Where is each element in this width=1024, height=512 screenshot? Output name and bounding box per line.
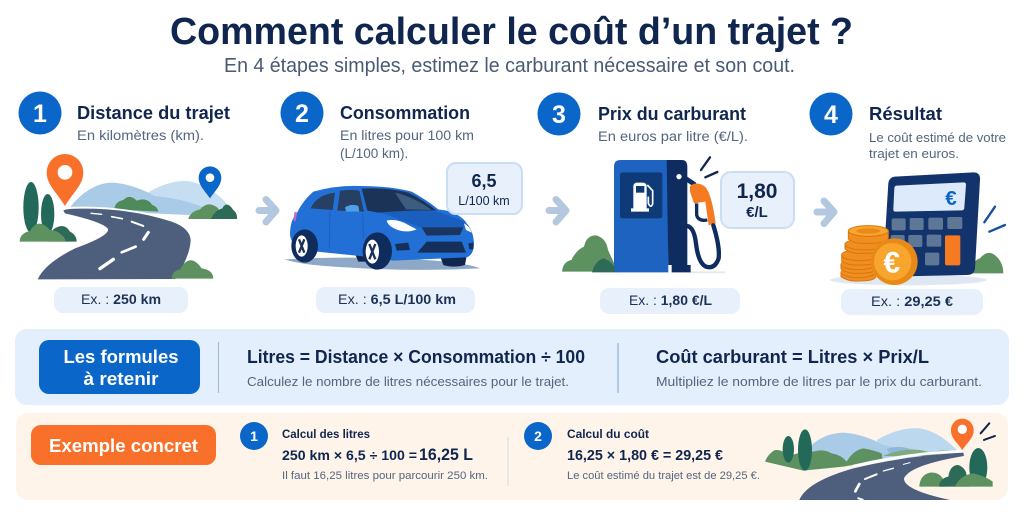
value callout: 6,5 L/100 km: L/100 km: [458, 194, 510, 208]
example step 2: cost calculation: 16,25 × 1,80 € = 29,25 €: [567, 448, 723, 464]
subtitle: En 4 étapes simples, estimez le carburant nécessaire et son cout.: [224, 55, 795, 77]
example step 2: cost calculation: [524, 422, 760, 482]
step 1 number badge: [18, 92, 62, 134]
illustration: calculator and coins: €: [883, 246, 900, 279]
step 1 example pill: [54, 287, 188, 313]
example step 2: cost calculation: 2: [534, 428, 542, 444]
panel: formulas: [15, 329, 1009, 405]
step 1 number badge: 1: [33, 100, 47, 128]
example step 1: litres calculation: 16,25 L: [419, 445, 473, 464]
value callout: 6,5 L/100 km: 6,5: [471, 171, 497, 191]
example step 1: litres calculation: Calcul des litres: [282, 427, 370, 441]
example step 1: litres calculation: Il faut 16,25 litres pour parcourir 250 km.: [282, 470, 488, 482]
step 4 description: trajet en euros.: [869, 147, 959, 161]
arrow 2: [549, 200, 566, 222]
step 1 description: En kilomètres (km).: [77, 128, 204, 143]
arrow 1: [259, 200, 276, 222]
example step 2: cost calculation: Le coût estimé du trajet est de 29,25 €.: [567, 470, 760, 482]
value callout: 1,80 €/L: €/L: [746, 204, 768, 221]
step 4 example pill: [841, 289, 983, 315]
step 3: fuel price: [538, 92, 794, 314]
formulas label button: à retenir: [84, 369, 158, 389]
step 2 description: (L/100 km).: [340, 146, 408, 161]
title: Comment calculer le coût d’un trajet ?: [170, 11, 853, 53]
illustration: blue car: [285, 186, 480, 270]
illustration: winding road with pins: [20, 154, 237, 279]
step 2 description: En litres pour 100 km: [340, 128, 474, 143]
example step 1: litres calculation: 250 km × 6,5 ÷ 100 =: [282, 447, 417, 463]
step 1 example pill: Ex. : 250 km: [81, 291, 161, 307]
step 3 number badge: 3: [552, 101, 566, 129]
step 4 number badge: [810, 92, 852, 136]
step 2: consumption: [280, 92, 522, 313]
example step 1: litres calculation: 1: [250, 428, 258, 444]
step 4: result: [810, 92, 1006, 315]
step 4 heading: Résultat: [869, 104, 942, 124]
formula 1: litres: Calculez le nombre de litres nécessaires pour le trajet.: [247, 375, 569, 389]
formulas label button: Les formules: [64, 347, 178, 367]
formula 2: fuel cost: Coût carburant = Litres × Prix/L: [656, 347, 929, 367]
step 3 description: En euros par litre (€/L).: [598, 129, 748, 144]
formula 1: litres: [247, 347, 585, 389]
step 4 description: Le coût estimé de votre: [869, 131, 1006, 145]
step 3 heading: Prix du carburant: [598, 104, 746, 124]
illustration: calculator and coins: €: [945, 187, 957, 210]
step 3 example pill: [600, 288, 740, 314]
formula 1: litres: Litres = Distance × Consommation ÷ 100: [247, 347, 585, 367]
step 1: distance: [18, 92, 237, 313]
step 2 heading: Consommation: [340, 103, 470, 123]
value callout: 1,80 €/L: 1,80: [737, 180, 777, 203]
value callout: 1,80 €/L: [721, 172, 794, 228]
arrow 3: [817, 201, 834, 224]
example step 1: litres calculation: [240, 422, 488, 482]
value callout: 6,5 L/100 km: [447, 163, 522, 214]
step 1 heading: Distance du trajet: [77, 103, 230, 123]
illustration: fuel pump: [562, 157, 725, 272]
step 4 number badge: 4: [824, 101, 838, 129]
formula 2: fuel cost: [656, 347, 982, 389]
step 2 example pill: [316, 287, 475, 313]
step 3 example pill: Ex. : 1,80 €/L: [629, 292, 712, 308]
illustration: calculator and coins: [830, 172, 1005, 285]
formula 2: fuel cost: Multipliez le nombre de litres par le prix du carburant.: [656, 375, 982, 389]
step 2 example pill: Ex. : 6,5 L/100 km: [338, 291, 456, 307]
step 2 number badge: [280, 92, 324, 134]
example step 2: cost calculation: Calcul du coût: [567, 427, 649, 441]
illustration: road landscape with pin: [765, 419, 995, 500]
step 2 number badge: 2: [295, 100, 309, 128]
panel: worked example: [16, 413, 1008, 500]
example label button: [31, 425, 216, 465]
step 4 example pill: Ex. : 29,25 €: [871, 293, 953, 309]
step 3 number badge: [538, 92, 580, 136]
formulas label button: [39, 340, 200, 394]
example label button: Exemple concret: [49, 436, 198, 456]
